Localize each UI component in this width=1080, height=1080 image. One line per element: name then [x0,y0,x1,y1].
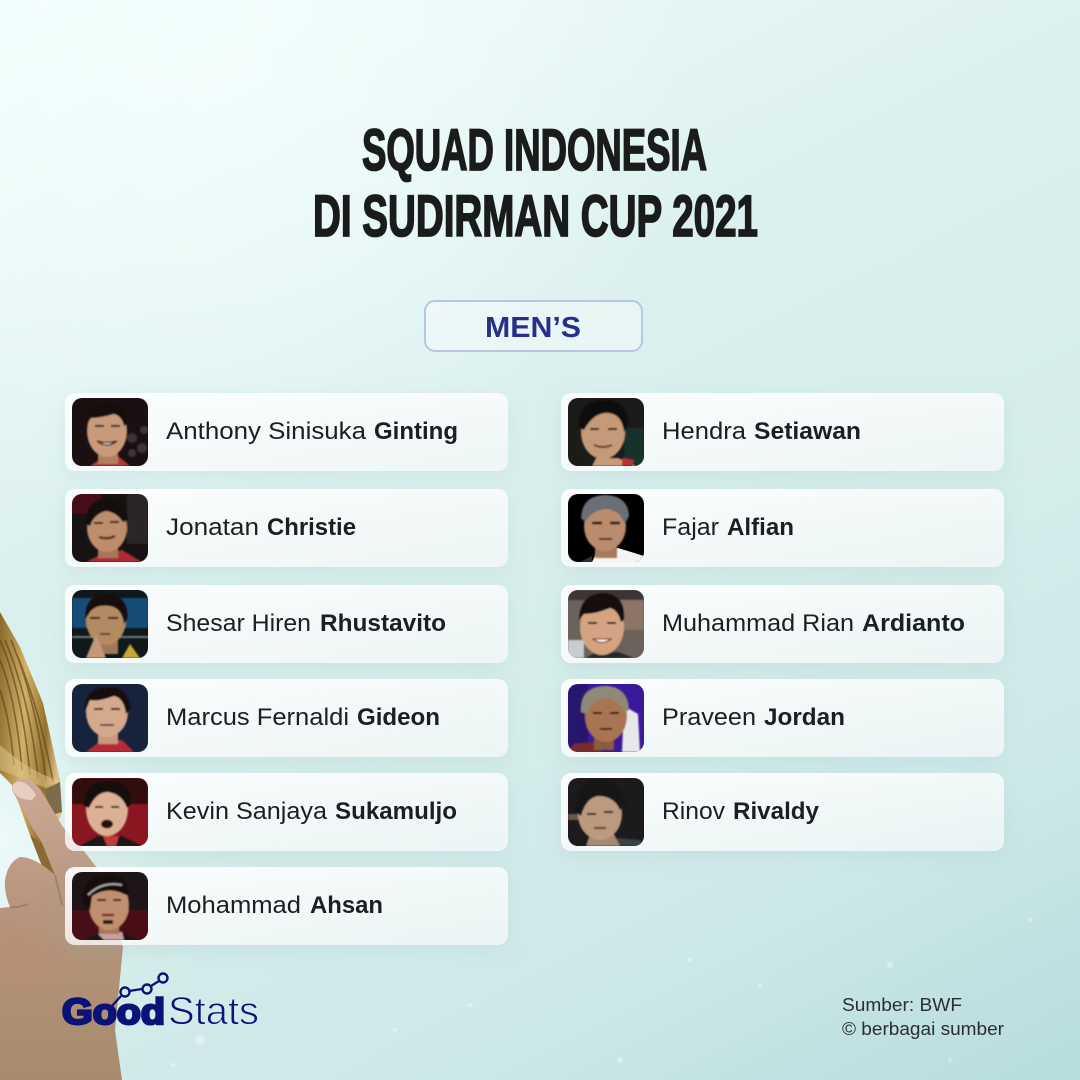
photo: Jordan [568,684,644,752]
player card: Praveen Jordan [561,679,1004,757]
photo: Gideon [72,684,148,752]
category badge: men's [425,301,642,351]
category badge: men's: MEN’S [485,312,581,344]
hand holding trophy [0,778,123,1080]
photo: Rhustavito [72,590,148,658]
player card: Kevin Sanjaya Sukamuljo: Kevin Sanjaya [166,798,328,825]
photo: Rivaldy [568,778,644,846]
player card: Praveen Jordan: Praveen [662,704,756,731]
player card: Hendra Setiawan: Setiawan [754,418,861,445]
icon: growth line in logo [112,974,168,1006]
source note: © berbagai sumber [842,1019,1004,1039]
player card: Muhammad Rian Ardianto [561,585,1004,663]
photo: Sukamuljo [72,778,148,846]
photo: Ahsan [72,872,148,940]
title [313,118,758,249]
photo: Christie [72,494,148,562]
player card: Muhammad Rian Ardianto: Ardianto [862,610,965,637]
photo: Setiawan [568,398,644,466]
player card: Shesar Hiren Rhustavito: Shesar Hiren [166,610,311,637]
player card: Fajar Alfian: Alfian [727,514,794,541]
player card: Anthony Sinisuka Ginting: Ginting [374,418,458,445]
trophy [0,612,62,875]
player card: Fajar Alfian: Fajar [662,514,719,541]
player card: Fajar Alfian [561,489,1004,567]
title: SQUAD INDONESIA [362,118,707,183]
player card: Marcus Fernaldi Gideon [65,679,508,757]
logo: GoodStats [62,974,259,1033]
player card: Praveen Jordan: Jordan [764,704,845,731]
player card: Jonatan Christie [65,489,508,567]
player card: Shesar Hiren Rhustavito [65,585,508,663]
player card: Shesar Hiren Rhustavito: Rhustavito [320,610,446,637]
photo: Ardianto [568,590,644,658]
source note [842,995,1004,1039]
photo: Ginting [72,398,148,466]
player card: Hendra Setiawan: Hendra [662,418,747,445]
player card: Mohammad Ahsan [65,867,508,945]
player card: Kevin Sanjaya Sukamuljo [65,773,508,851]
player card: Jonatan Christie: Christie [267,514,356,541]
player card: Anthony Sinisuka Ginting: Anthony Sinisuka [166,418,367,445]
player card: Marcus Fernaldi Gideon: Gideon [357,704,440,731]
player card: Marcus Fernaldi Gideon: Marcus Fernaldi [166,704,349,731]
player card: Anthony Sinisuka Ginting [65,393,508,471]
player card: Mohammad Ahsan: Mohammad [166,892,301,919]
source note: Sumber: BWF [842,995,962,1015]
player card: Rinov Rivaldy: Rinov [662,798,725,825]
player card: Rinov Rivaldy [561,773,1004,851]
logo: GoodStats: Good [62,991,165,1032]
player card: Kevin Sanjaya Sukamuljo: Sukamuljo [335,798,457,825]
title: DI SUDIRMAN CUP 2021 [313,184,758,249]
player card: Rinov Rivaldy: Rivaldy [733,798,820,825]
player card: Muhammad Rian Ardianto: Muhammad Rian [662,610,854,637]
photo: Alfian [568,494,644,562]
player card: Mohammad Ahsan: Ahsan [310,892,383,919]
player card: Hendra Setiawan [561,393,1004,471]
logo: GoodStats: Stats [168,990,259,1033]
player card: Jonatan Christie: Jonatan [166,514,259,541]
